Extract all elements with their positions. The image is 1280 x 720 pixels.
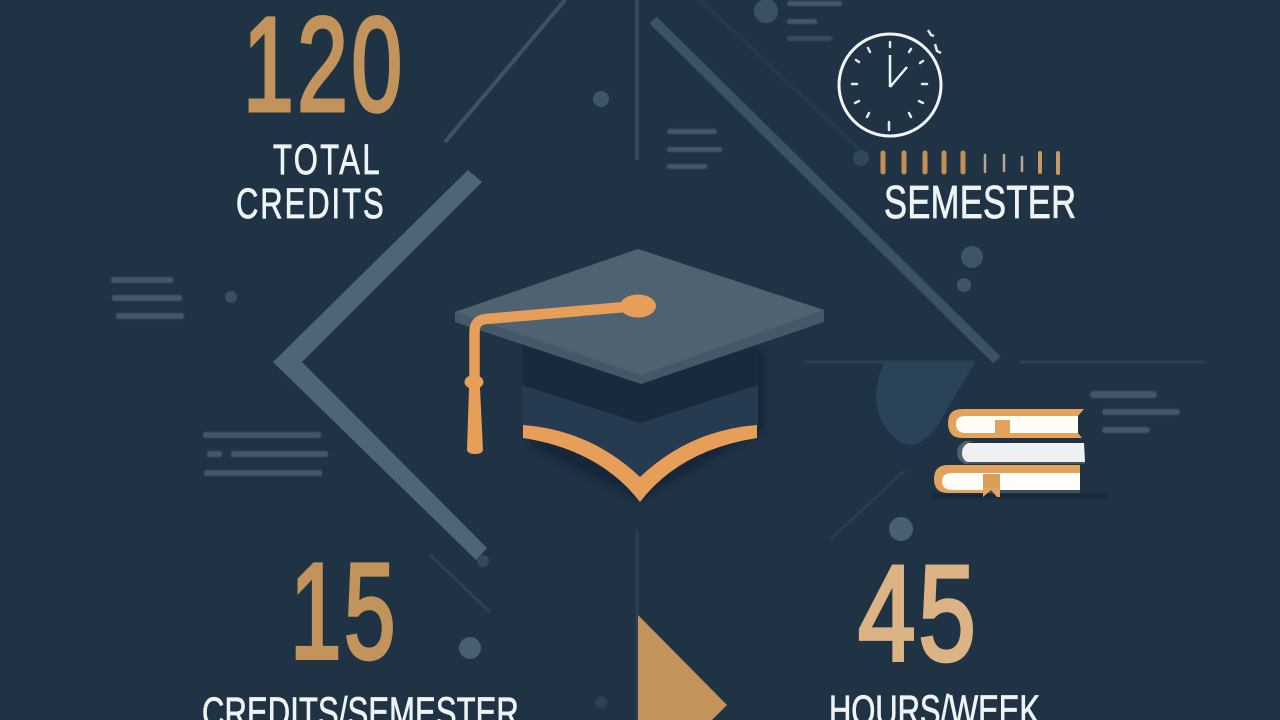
label: total credits: TOTAL bbox=[273, 135, 380, 183]
bottom book bbox=[934, 465, 1080, 493]
label: total credits: CREDITS bbox=[236, 179, 384, 227]
stat: 15 credits/semester bbox=[202, 535, 519, 720]
icon: graduation cap bbox=[455, 249, 824, 502]
decorative blue shield shape bbox=[876, 362, 975, 445]
number: 15: 15 bbox=[290, 535, 395, 687]
left chevron bbox=[273, 170, 487, 560]
cap shadow bbox=[530, 350, 764, 500]
top book bbox=[948, 409, 1084, 438]
decorative circles bbox=[225, 0, 983, 708]
background geometric lines bbox=[430, 0, 1205, 720]
icon: clock bbox=[839, 30, 941, 136]
icon: stack of books bbox=[932, 409, 1107, 498]
middle book bbox=[961, 443, 1085, 462]
cap band bbox=[523, 425, 757, 502]
stat: 120 total credits bbox=[236, 0, 402, 227]
number: 45: 45 bbox=[858, 537, 976, 689]
label: semester: SEMESTER bbox=[884, 176, 1076, 228]
icon: gold triangle bbox=[638, 615, 727, 720]
orange tick marks bbox=[883, 153, 1058, 173]
mortarboard bbox=[455, 249, 824, 384]
label: total credits bbox=[236, 135, 384, 227]
cap body bbox=[522, 345, 758, 478]
tassel bbox=[464, 294, 656, 454]
decorative text-like bars bbox=[111, 1, 1180, 476]
book shadow bbox=[932, 494, 1107, 498]
stat: 45 hours/week bbox=[829, 537, 1040, 720]
